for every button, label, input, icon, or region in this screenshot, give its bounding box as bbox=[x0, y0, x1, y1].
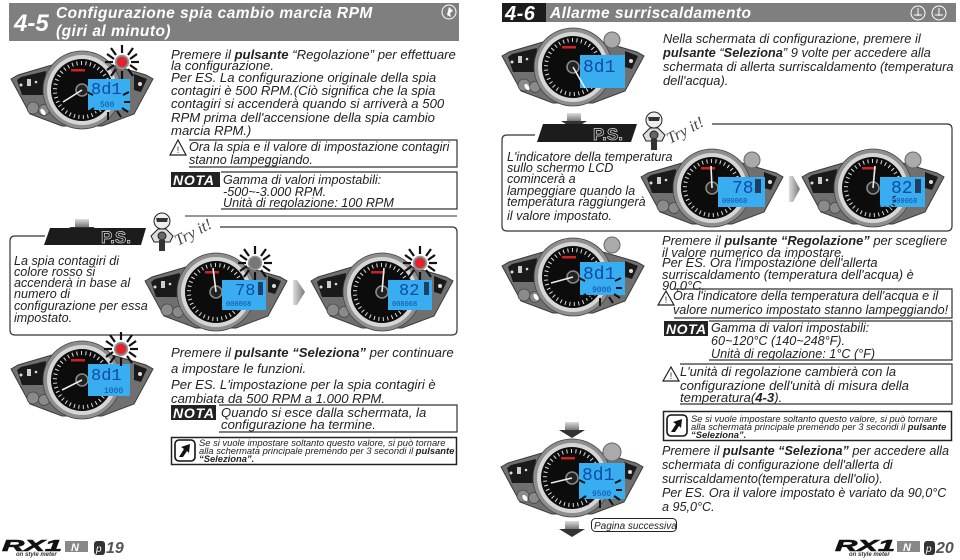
warning callout: unit: L'unità di regolazione cambierà con la bbox=[680, 364, 896, 379]
text: seleziona 4-6: Per ES. Ora il valore impostato è variato da 90,0°C bbox=[662, 486, 947, 500]
note: exit: Quando si esce dalla schermata, la bbox=[221, 405, 426, 420]
footer logo left: on style meter bbox=[16, 552, 57, 558]
gauge: bottom left: 8d1 bbox=[91, 367, 122, 386]
gauge: 82: 82 bbox=[891, 179, 913, 199]
text: regolazione 4-6: Premere il pulsante “Regolazione” per scegliere bbox=[662, 233, 947, 248]
P.S. tab bbox=[44, 228, 146, 247]
shortcut box left bbox=[172, 437, 456, 464]
intro text 4-5 bbox=[171, 47, 456, 138]
intro text 4-6: Nella schermata di configurazione, premere il bbox=[663, 31, 922, 46]
gauge: 78 bbox=[145, 246, 287, 331]
footer logo left bbox=[2, 538, 124, 558]
header: section 4-5: 4-5 bbox=[13, 10, 49, 37]
gauge: middle right: 9000 bbox=[592, 286, 611, 295]
note: range right: Unità di regolazione: 1°C (°F) bbox=[711, 347, 875, 361]
gauge: top right section: 8d1 bbox=[583, 58, 615, 78]
try it: Try it! bbox=[664, 114, 707, 148]
P.S. text: impostato. bbox=[14, 311, 72, 325]
shortcut box left: alla schermata principale premendo per 3 secondi il pulsante bbox=[199, 445, 454, 456]
gauge: 78: 000068 bbox=[722, 198, 747, 206]
text: regolazione 4-6: Per ES. Ora l'impostazione dell'allerta bbox=[662, 255, 878, 270]
shortcut box right: “Seleziona”. bbox=[691, 429, 746, 440]
P.S. text: colore rosso si bbox=[14, 265, 96, 279]
panel: P.S. right bbox=[502, 112, 952, 231]
gauge: 82: 82 bbox=[399, 282, 419, 301]
P.S. tab bbox=[537, 124, 637, 144]
warning callout: right: ! bbox=[665, 295, 667, 305]
text: seleziona 4-6: schermata di configurazione dell'allerta di bbox=[662, 458, 894, 472]
footer logo left: 19 bbox=[106, 540, 124, 557]
warning callout: lampeggiando: Ora la spia e il valore di impostazione contagiri bbox=[189, 140, 451, 154]
intro text 4-5: contagiri si accenderà quando si arriverà a 500 bbox=[171, 96, 445, 111]
footer logo right: on style meter bbox=[849, 552, 890, 558]
P.S. text bbox=[507, 150, 673, 223]
warning callout: unit: configurazione dell'unità di misura della bbox=[680, 378, 909, 393]
warning callout: lampeggiando bbox=[170, 140, 457, 167]
warning callout: right bbox=[658, 289, 952, 318]
gauge: top right section bbox=[502, 28, 644, 106]
icon: rider bbox=[643, 112, 665, 150]
gauge: bottom right: 8d1 bbox=[582, 466, 614, 486]
gauge: bottom right: 9500 bbox=[592, 490, 611, 499]
rule above panel bbox=[185, 215, 457, 217]
gauge: 82 bbox=[802, 149, 944, 227]
gauge: top left with flashing light bbox=[11, 45, 153, 129]
P.S. tab: P.S. bbox=[593, 125, 623, 144]
footer logo left: N bbox=[71, 542, 80, 554]
intro text 4-5: marcia RPM.) bbox=[171, 123, 251, 138]
gauge: 78: 78 bbox=[235, 282, 255, 301]
gauge: 78: 000068 bbox=[226, 301, 251, 309]
intro text 4-6: pulsante “Seleziona” 9 volte per accedere alla bbox=[662, 45, 931, 60]
note: range of values: Gamma di valori impostabili: bbox=[223, 173, 381, 187]
text: seleziona 4-5: Per ES. L'impostazione per la spia contagiri è bbox=[171, 377, 436, 392]
panel: P.S. left bbox=[10, 213, 457, 335]
text: seleziona 4-5: a impostare le funzioni. bbox=[171, 361, 306, 376]
P.S. text: sullo schermo LCD bbox=[507, 161, 613, 175]
P.S. text: temperatura raggiungerà bbox=[507, 195, 646, 209]
shortcut box right bbox=[664, 412, 952, 440]
warning callout: right: Ora l'indicatore della temperatura dell'acqua e il bbox=[673, 289, 939, 303]
note: range right: 60~120°C (140~248°F). bbox=[711, 334, 845, 348]
text: regolazione 4-6 bbox=[662, 233, 947, 293]
text: seleziona 4-6: surriscaldamento(temperatura dell'olio). bbox=[662, 472, 883, 486]
note: range right: NOTA bbox=[666, 321, 707, 337]
text: seleziona 4-5: Premere il pulsante “Seleziona” per continuare bbox=[171, 345, 454, 360]
warning callout: unit bbox=[663, 364, 952, 405]
note: exit: configurazione ha termine. bbox=[221, 417, 376, 432]
icon: rider bbox=[151, 213, 173, 251]
shortcut box left: Se si vuole impostare soltanto questo valore, si può tornare bbox=[199, 437, 446, 448]
shortcut box right: alla schermata principale premendo per 3 secondi il pulsante bbox=[691, 421, 946, 432]
warning callout: lampeggiando: stanno lampeggiando. bbox=[189, 153, 313, 167]
note: exit: NOTA bbox=[173, 405, 215, 421]
intro text 4-5: contagiri è 500 RPM.(Ciò significa che la spia bbox=[171, 83, 435, 98]
P.S. text bbox=[14, 254, 148, 325]
header: section 4-6: 4-6 bbox=[504, 3, 536, 25]
P.S. text: il valore impostato. bbox=[507, 209, 612, 223]
gauge: bottom right bbox=[501, 439, 643, 517]
footer logo right: p bbox=[925, 544, 932, 555]
header: section 4-6 bbox=[502, 3, 956, 25]
text: seleziona 4-6: a 95,0°C. bbox=[662, 500, 715, 514]
P.S. text: L'indicatore della temperatura bbox=[507, 150, 673, 164]
text: seleziona 4-5 bbox=[171, 345, 454, 406]
gauge: bottom left: 1000 bbox=[104, 387, 123, 396]
warning callout: right: valore numerico impostato stanno lampeggiando! bbox=[673, 303, 949, 317]
gauge: top left with flashing light: 500 bbox=[100, 101, 115, 110]
P.S. tab: P.S. bbox=[101, 228, 131, 247]
gauge: 82: 000068 bbox=[892, 198, 917, 206]
header: section 4-6: Allarme surriscaldamento bbox=[549, 5, 751, 22]
intro text 4-5: la configurazione. bbox=[171, 58, 274, 73]
footer logo left: RX1 bbox=[2, 538, 62, 555]
next page pill: Pagina successiva bbox=[594, 521, 677, 532]
shortcut box right: Se si vuole impostare soltanto questo valore, si può tornare bbox=[691, 413, 938, 424]
note: exit bbox=[171, 405, 457, 432]
text: seleziona 4-6: Premere il pulsante “Seleziona” per accedere alla bbox=[662, 444, 949, 458]
gauge: top left with flashing light: 8d1 bbox=[91, 81, 122, 100]
gauge: 78 bbox=[641, 149, 783, 227]
gauge: 78: 78 bbox=[732, 179, 754, 199]
intro text 4-5: Premere il pulsante “Regolazione” per effettuare bbox=[171, 47, 456, 62]
intro text 4-6: schermata di allerta surriscaldamento (temperatura bbox=[663, 59, 954, 74]
header: section 4-5: Configurazione spia cambio marcia RPM bbox=[56, 5, 373, 22]
shortcut box left: “Seleziona”. bbox=[199, 453, 254, 464]
intro text 4-6 bbox=[662, 31, 954, 88]
arrow bbox=[789, 176, 800, 202]
text: seleziona 4-5: cambiata da 500 RPM a 1.000 RPM. bbox=[171, 391, 385, 406]
intro text 4-6: dell'acqua). bbox=[663, 73, 728, 88]
note: range of values: NOTA bbox=[173, 172, 215, 188]
arrow: down lower bbox=[559, 521, 585, 537]
intro text 4-5: Per ES. La configurazione originale della spia bbox=[171, 70, 436, 85]
text: seleziona 4-6 bbox=[662, 444, 949, 514]
warning callout: lampeggiando: ! bbox=[177, 145, 179, 155]
header: section 4-5 bbox=[9, 3, 459, 41]
intro text 4-5: RPM prima dell'accensione della spia cambio bbox=[171, 110, 435, 125]
text: regolazione 4-6: 90,0°C. bbox=[662, 278, 705, 293]
text: regolazione 4-6: il valore numerico da impostare. bbox=[662, 245, 845, 260]
note: range right: Gamma di valori impostabili: bbox=[711, 321, 869, 335]
gauge: middle right: 8d1 bbox=[583, 265, 615, 285]
warning callout: unit: temperatura(4-3). bbox=[680, 390, 782, 405]
text: regolazione 4-6: surriscaldamento (temperatura dell'acqua) è bbox=[662, 267, 914, 282]
P.S. text: lampeggiare quando la bbox=[507, 184, 635, 198]
header: section 4-5: (giri al minuto) bbox=[56, 23, 171, 40]
P.S. text: accenderà in base al bbox=[14, 276, 131, 290]
gauge: bottom left bbox=[11, 332, 153, 419]
note: range of values: -500~-3.000 RPM. bbox=[223, 185, 326, 199]
P.S. text: configurazione per essa bbox=[14, 299, 148, 313]
footer logo right: N bbox=[903, 542, 912, 554]
note: range of values: Unità di regolazione: 100 RPM bbox=[223, 196, 394, 210]
gauge: 82: 000068 bbox=[392, 301, 417, 309]
P.S. text: La spia contagiri di bbox=[14, 254, 120, 268]
arrow: down upper bbox=[559, 422, 585, 438]
gauge: 82 bbox=[311, 246, 453, 331]
footer logo right: RX1 bbox=[835, 538, 895, 555]
arrow bbox=[293, 280, 305, 305]
footer logo right: 20 bbox=[935, 540, 954, 557]
note: range right bbox=[664, 321, 952, 361]
note: range of values bbox=[171, 172, 457, 210]
P.S. text: comincerà a bbox=[507, 172, 576, 186]
gauge: middle right bbox=[502, 237, 644, 316]
footer logo left: p bbox=[95, 544, 102, 555]
warning callout: unit: ! bbox=[670, 371, 672, 381]
try it: Try it! bbox=[172, 216, 215, 250]
footer logo right bbox=[835, 538, 954, 558]
P.S. text: numero di bbox=[14, 287, 71, 301]
